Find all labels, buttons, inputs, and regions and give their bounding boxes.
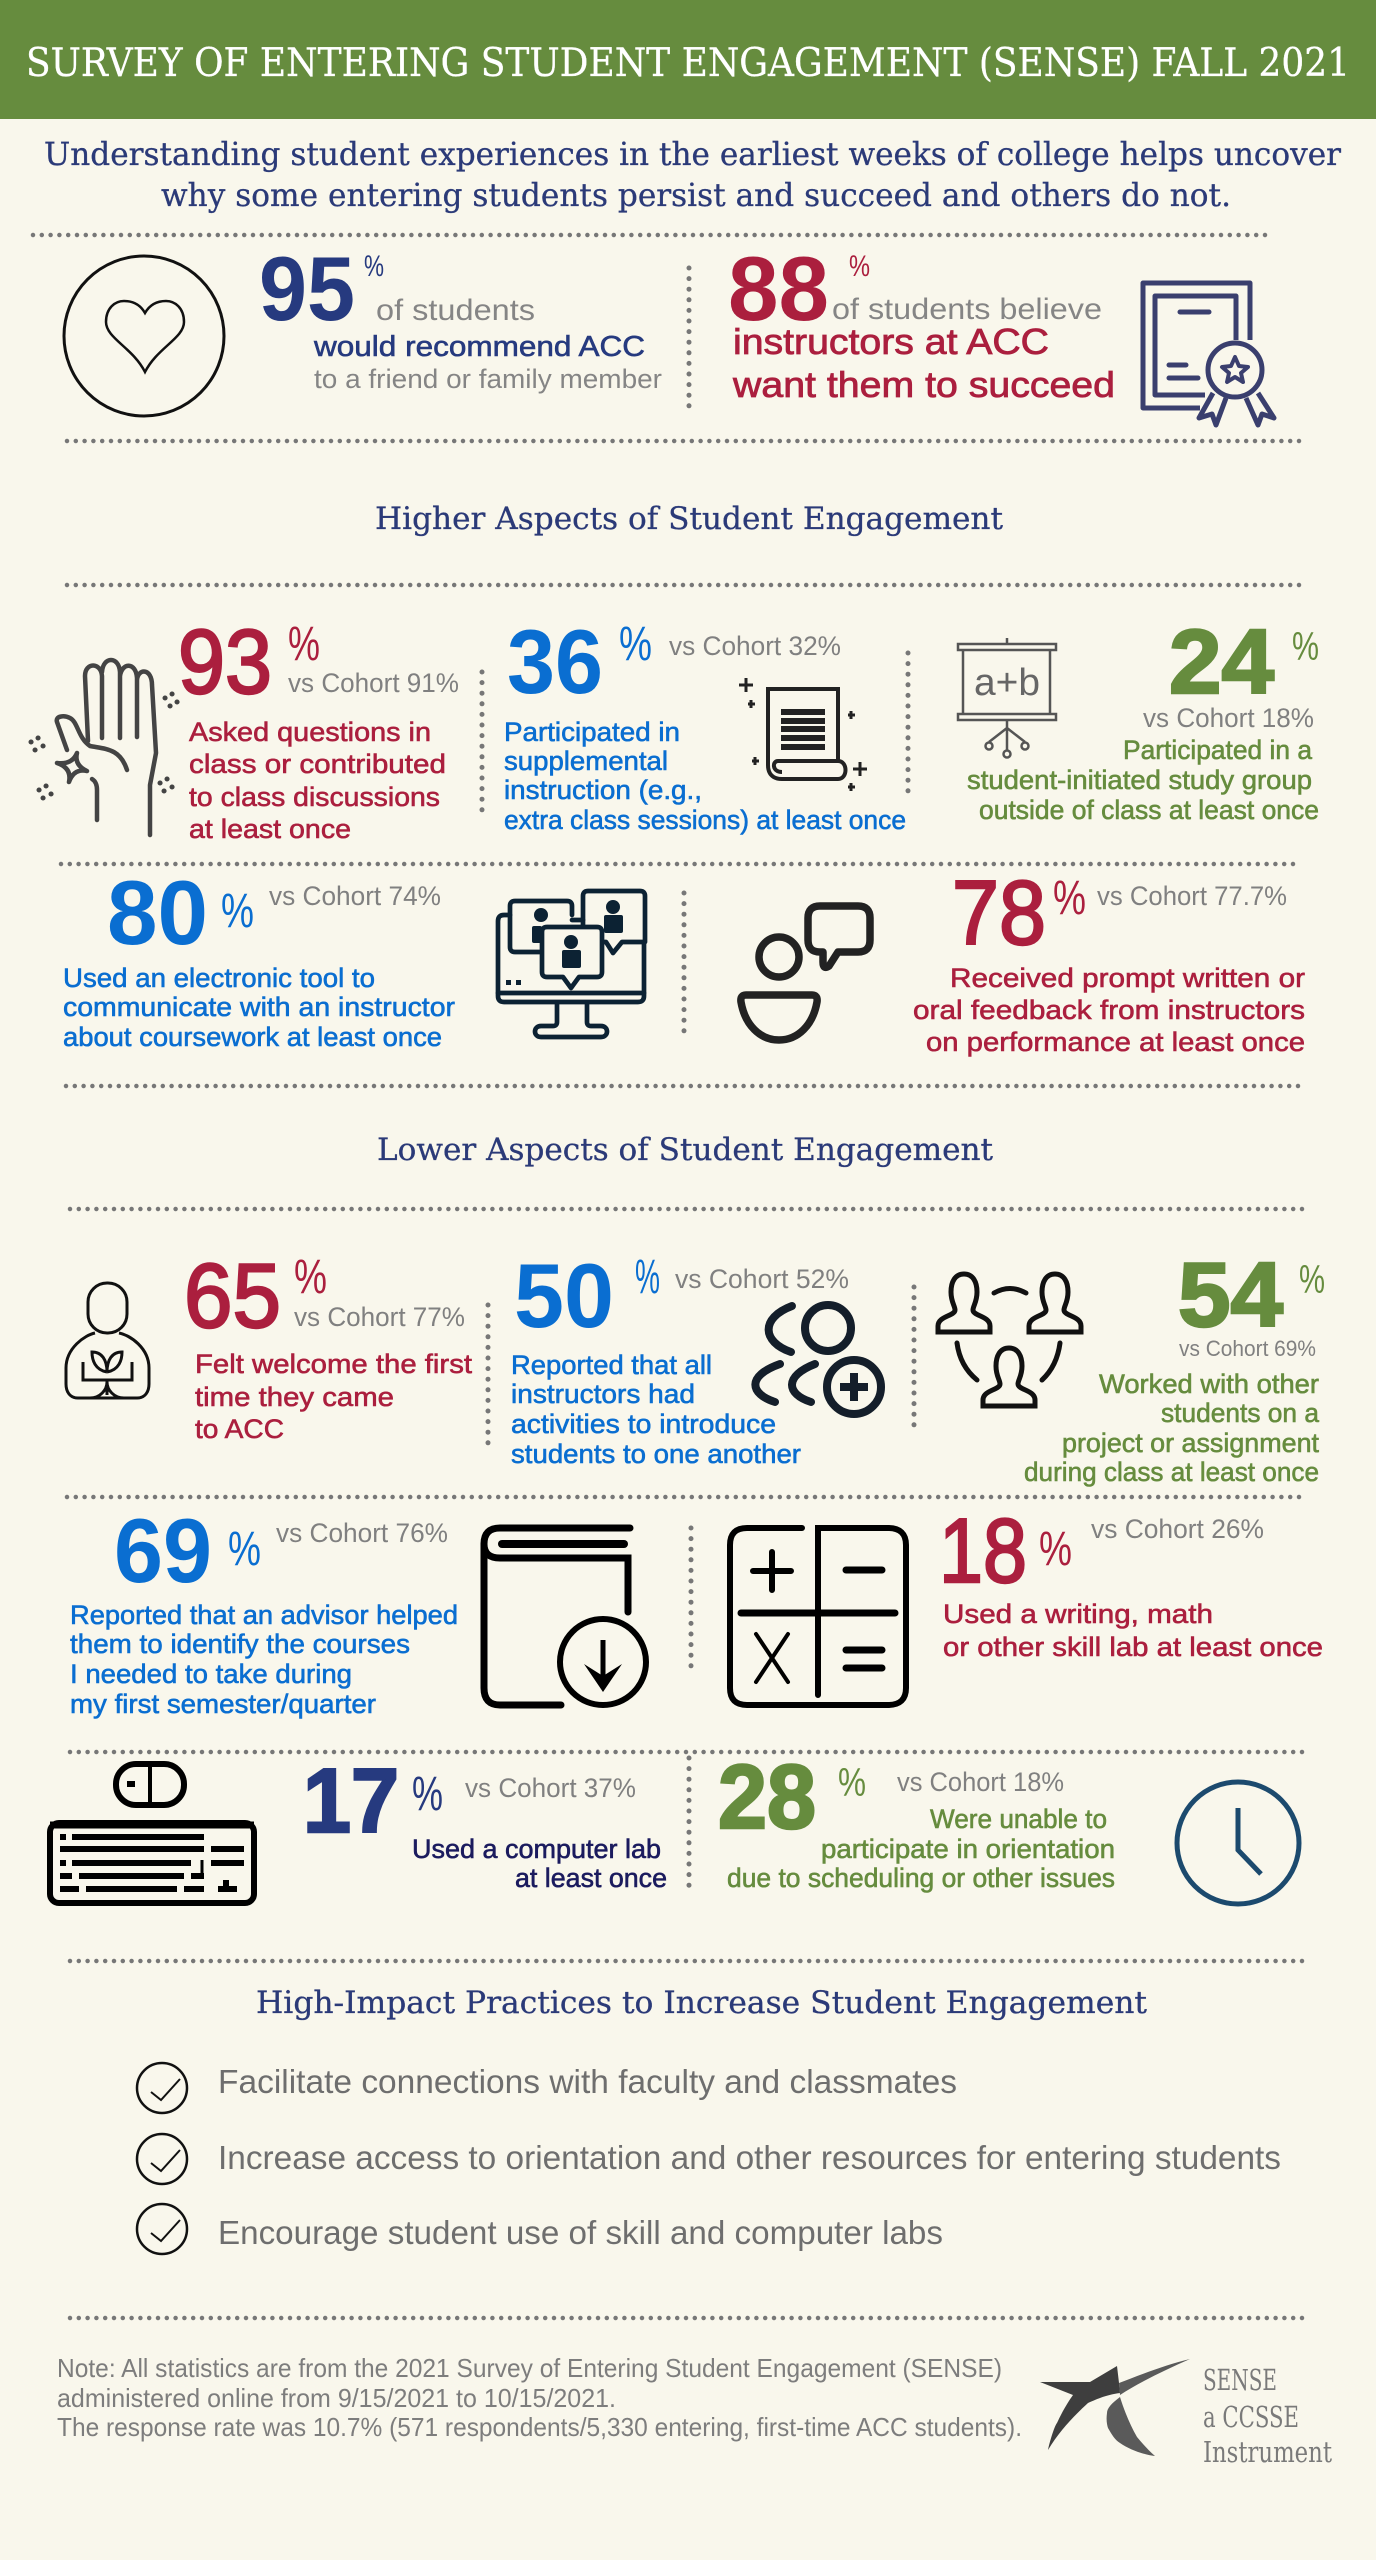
logo text: SENSE (1203, 2363, 1277, 2397)
description: Participated in (504, 717, 680, 747)
description (504, 717, 906, 835)
percent sign: % (288, 618, 320, 671)
panel: 95 percent recommend ACC (64, 239, 662, 416)
stat: 69: 69 (114, 1501, 212, 1602)
logo: SENSE (1040, 2359, 1332, 2469)
description: them to identify the courses (70, 1629, 410, 1659)
icon: video chat monitor (498, 891, 645, 1037)
list item 2 (137, 2134, 1281, 2184)
percent sign: % (635, 1251, 660, 1304)
cohort comparison: vs Cohort 76% (276, 1518, 448, 1548)
stat: 28: 28 (718, 1747, 816, 1848)
panel: 28 percent orientation (718, 1747, 1299, 1904)
cohort comparison: vs Cohort 74% (269, 881, 441, 911)
icon: person with speech bubble (741, 906, 870, 1040)
icon: book download (484, 1528, 646, 1705)
footnote (57, 2353, 1022, 2442)
icon: scroll (739, 678, 867, 791)
description (412, 1834, 667, 1893)
description: extra class sessions) at least once (504, 805, 906, 835)
percent sign: % (1299, 1258, 1325, 1302)
description: instructors had (511, 1379, 695, 1409)
percent sign: % (619, 618, 652, 671)
text: instructors want them to succeed (732, 293, 1115, 405)
text: recommend: would recommend ACC (313, 331, 645, 363)
description: at least once (515, 1863, 667, 1893)
text: recommend: of students (376, 294, 535, 327)
intro text: why some entering students persist and succeed and others do not. (161, 176, 1231, 214)
panel: 88 percent instructors (728, 239, 1274, 425)
text: instructors want them to succeed: instructors at ACC (733, 321, 1049, 362)
description: student-initiated study group (967, 765, 1312, 795)
description (967, 735, 1319, 825)
list item 3: Encourage student use of skill and computer labs (218, 2214, 943, 2251)
list item 1: Facilitate connections with faculty and classmates (218, 2063, 957, 2100)
description (189, 717, 446, 844)
description: at least once (189, 814, 351, 844)
description: activities to introduce (511, 1409, 776, 1439)
percent sign: % (1039, 1523, 1072, 1576)
description: to class discussions (189, 782, 440, 812)
cohort comparison: vs Cohort 37% (465, 1773, 636, 1803)
logo text: a CCSSE (1203, 2400, 1299, 2434)
list: practices (137, 2063, 1281, 2254)
panel: 50 percent activities (511, 1246, 881, 1469)
cohort comparison: vs Cohort 77.7% (1097, 881, 1287, 911)
icon: certificate (1143, 283, 1274, 425)
panel: 54 percent worked with others (938, 1245, 1325, 1487)
cohort comparison: vs Cohort 52% (675, 1264, 849, 1294)
panel: 18 percent skill lab (730, 1501, 1323, 1705)
cohort comparison: vs Cohort 32% (669, 631, 841, 661)
description: participate in orientation (821, 1834, 1115, 1864)
text: recommend (313, 294, 662, 394)
icon: raised hand (31, 660, 177, 835)
stat: 80: 80 (107, 863, 208, 964)
description: Felt welcome the first (195, 1349, 473, 1379)
icon: presentation board a+b: a+b (974, 662, 1040, 704)
percent sign: % (228, 1523, 261, 1576)
description (195, 1349, 473, 1444)
icon: keyboard and mouse (50, 1764, 254, 1903)
logo text: Instrument (1203, 2435, 1332, 2469)
panel: 93 percent asked questions (31, 612, 459, 844)
panel: 78 percent prompt feedback (741, 863, 1305, 1057)
panel: 80 percent electronic tool (63, 863, 645, 1052)
description: outside of class at least once (979, 795, 1319, 825)
description: Were unable to (930, 1804, 1107, 1834)
description: Received prompt written or (950, 963, 1305, 993)
logo mark (1040, 2359, 1190, 2456)
description (727, 1804, 1115, 1893)
stat: 50: 50 (514, 1246, 614, 1347)
stat: 36: 36 (507, 612, 603, 713)
description: time they came (195, 1382, 394, 1412)
description: supplemental (504, 746, 668, 776)
panel: 24 percent study group (958, 612, 1319, 825)
percent sign: % (412, 1768, 443, 1821)
description (511, 1350, 801, 1469)
heading: lower aspects: Lower Aspects of Student Engagement (377, 1132, 994, 1168)
description: I needed to take during (70, 1659, 352, 1689)
description: class or contributed (189, 749, 446, 779)
stat: 54: 54 (1178, 1245, 1283, 1346)
footnote: The response rate was 10.7% (571 respondents/5,330 entering, first-time ACC students). (57, 2412, 1022, 2442)
description: communicate with an instructor (63, 992, 455, 1022)
description: Participated in a (1123, 735, 1313, 765)
panel: 65 percent felt welcome (66, 1246, 473, 1444)
description: students on a (1161, 1398, 1320, 1428)
panel: 36 percent supplemental instruction (504, 612, 906, 835)
stat: 93: 93 (178, 612, 272, 713)
description (943, 1599, 1323, 1662)
icon: clock (1177, 1782, 1299, 1904)
description: about coursework at least once (63, 1022, 442, 1052)
percent sign: % (1053, 872, 1086, 925)
panel: 69 percent advisor (70, 1501, 646, 1719)
description: my first semester/quarter (70, 1689, 376, 1719)
stat: 78: 78 (952, 863, 1046, 964)
panel: 17 percent computer lab (50, 1751, 667, 1903)
icon: heart in circle (64, 256, 224, 416)
list item 2: Increase access to orientation and other resources for entering students (218, 2139, 1281, 2176)
description: on performance at least once (926, 1027, 1305, 1057)
description (70, 1600, 458, 1719)
intro text (44, 135, 1342, 214)
icon: calculator (730, 1528, 906, 1705)
stat: 18: 18 (939, 1501, 1027, 1602)
heading: higher aspects: Higher Aspects of Student Engagement (375, 501, 1004, 537)
description: due to scheduling or other issues (727, 1863, 1115, 1893)
cohort comparison: vs Cohort 26% (1091, 1514, 1264, 1544)
heading: high-impact practices: High-Impact Practices to Increase Student Engagement (256, 1985, 1148, 2021)
percent sign: % (849, 250, 870, 283)
list item 1 (137, 2063, 957, 2113)
list item 3 (137, 2204, 943, 2254)
header banner (0, 0, 1376, 119)
description: Worked with other (1099, 1369, 1319, 1399)
description: instruction (e.g., (504, 775, 702, 805)
cohort comparison: vs Cohort 69% (1179, 1336, 1316, 1361)
icon: three people (938, 1274, 1081, 1406)
percent sign: % (294, 1251, 327, 1304)
description: Used an electronic tool to (63, 963, 375, 993)
intro text: Understanding student experiences in the earliest weeks of college helps uncover (44, 135, 1342, 173)
percent sign: % (838, 1761, 866, 1805)
cohort comparison: vs Cohort 77% (294, 1302, 465, 1332)
description: Asked questions in (189, 717, 431, 747)
percent sign: % (364, 250, 384, 283)
description: Used a computer lab (412, 1834, 661, 1864)
description: oral feedback from instructors (913, 995, 1305, 1025)
footnote: administered online from 9/15/2021 to 10/15/2021. (57, 2383, 616, 2413)
text: instructors want them to succeed: of students believe (832, 293, 1102, 326)
stat: 24: 24 (1169, 612, 1274, 713)
footnote: Note: All statistics are from the 2021 Survey of Entering Student Engagement (SENSE) (57, 2353, 1002, 2383)
percent sign: % (1292, 625, 1319, 669)
logo text (1203, 2363, 1332, 2469)
description: students to one another (511, 1439, 801, 1469)
stat: 65: 65 (184, 1246, 281, 1347)
text: recommend: to a friend or family member (314, 364, 662, 394)
description: Reported that an advisor helped (70, 1600, 458, 1630)
description: to ACC (195, 1414, 284, 1444)
description (1024, 1369, 1320, 1487)
cohort comparison: vs Cohort 18% (1143, 703, 1314, 733)
description: or other skill lab at least once (943, 1632, 1323, 1662)
percent sign: % (221, 885, 254, 938)
stat: 88: 88 (728, 239, 829, 340)
stat: 17: 17 (303, 1751, 399, 1852)
description (63, 963, 455, 1052)
cohort comparison: vs Cohort 18% (897, 1767, 1064, 1797)
description: Used a writing, math (943, 1599, 1213, 1629)
cohort comparison: vs Cohort 91% (288, 668, 459, 698)
stat: 95: 95 (259, 239, 355, 340)
description: Reported that all (511, 1350, 712, 1380)
description: during class at least once (1024, 1457, 1319, 1487)
icon: group add (755, 1305, 881, 1414)
icon: person with plant (66, 1283, 149, 1398)
description: project or assignment (1062, 1428, 1319, 1458)
text: instructors want them to succeed: want them to succeed (732, 364, 1115, 405)
description (913, 963, 1305, 1057)
icon: presentation board a+b (958, 638, 1056, 758)
